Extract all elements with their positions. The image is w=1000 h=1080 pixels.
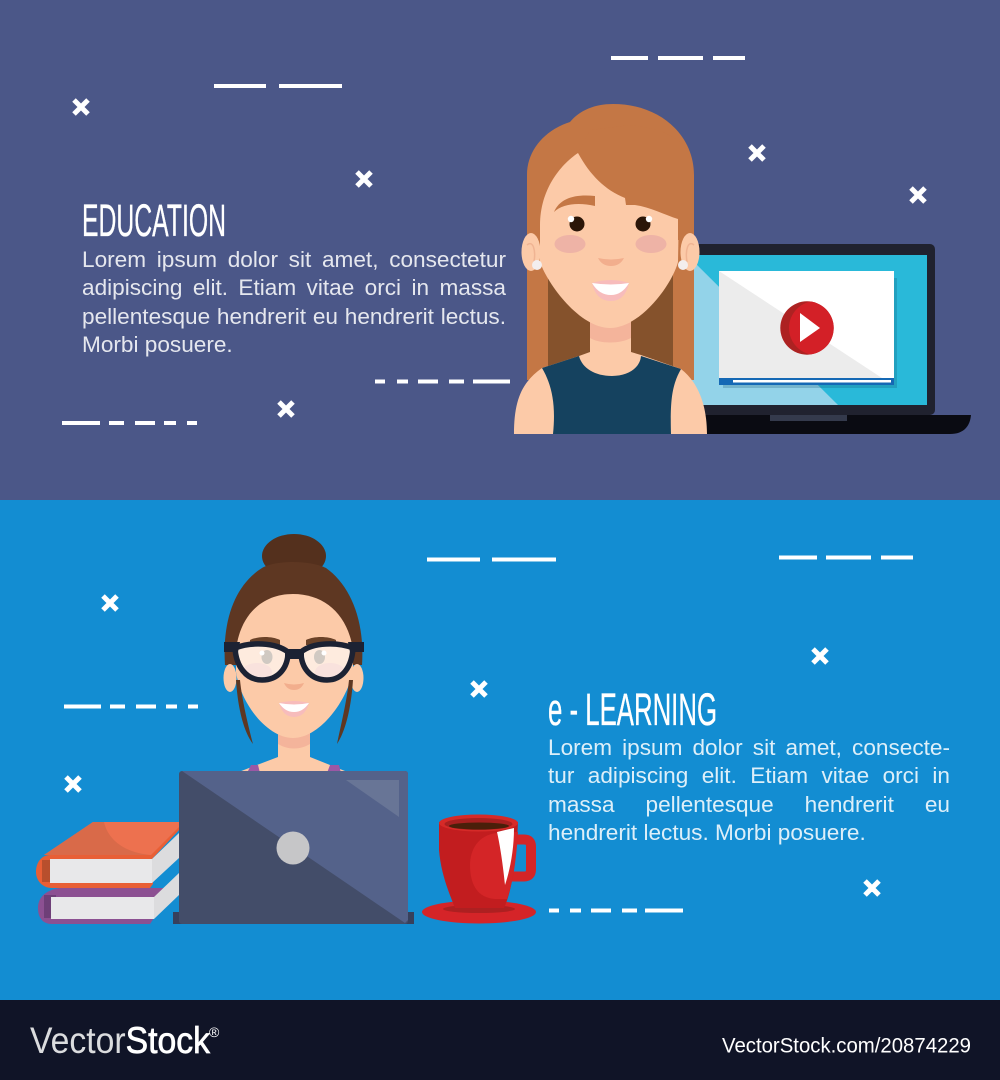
body text: education: pellentesque hendrerit eu hendrerit lectus. — [82, 304, 506, 329]
body text: education: Morbi posuere. — [82, 332, 233, 357]
body text: education: adipiscing elit. Etiam vitae orci in massa — [82, 275, 506, 300]
laptop with video player — [692, 244, 971, 434]
body text: e-learning: massa pellentesque hendrerit eu — [548, 792, 950, 817]
woman with long hair — [514, 104, 707, 434]
heading: education: EDUCATION — [82, 195, 226, 246]
decorative dashes and crosses — [64, 556, 913, 912]
body text: e-learning: Lorem ipsum dolor sit amet, consecte- — [548, 735, 950, 760]
body text: e-learning: tur adipiscing elit. Etiam vitae orci in — [548, 763, 950, 788]
icon: play button — [780, 301, 834, 355]
registered mark: ® — [209, 1024, 220, 1040]
panel: education — [62, 56, 971, 434]
panel: e-learning — [0, 500, 1000, 1000]
footer: watermark bar — [0, 1000, 1000, 1080]
body text: education: Lorem ipsum dolor sit amet, consectetur — [82, 247, 506, 272]
stock image id: VectorStock.com/20874229 — [722, 1034, 971, 1058]
logo: VectorStock: VectorStock — [30, 1020, 210, 1061]
woman with glasses and bun — [224, 534, 364, 773]
closed laptop — [173, 771, 414, 924]
heading: e-learning: e - LEARNING — [548, 684, 717, 735]
icon: glasses — [224, 642, 364, 680]
coffee cup on saucer — [422, 814, 536, 924]
body text: e-learning — [548, 735, 950, 845]
decorative dashes and crosses — [62, 56, 925, 425]
body text: e-learning: hendrerit lectus. Morbi posuere. — [548, 820, 866, 845]
stacked books — [36, 822, 179, 924]
body text: education — [82, 247, 506, 357]
